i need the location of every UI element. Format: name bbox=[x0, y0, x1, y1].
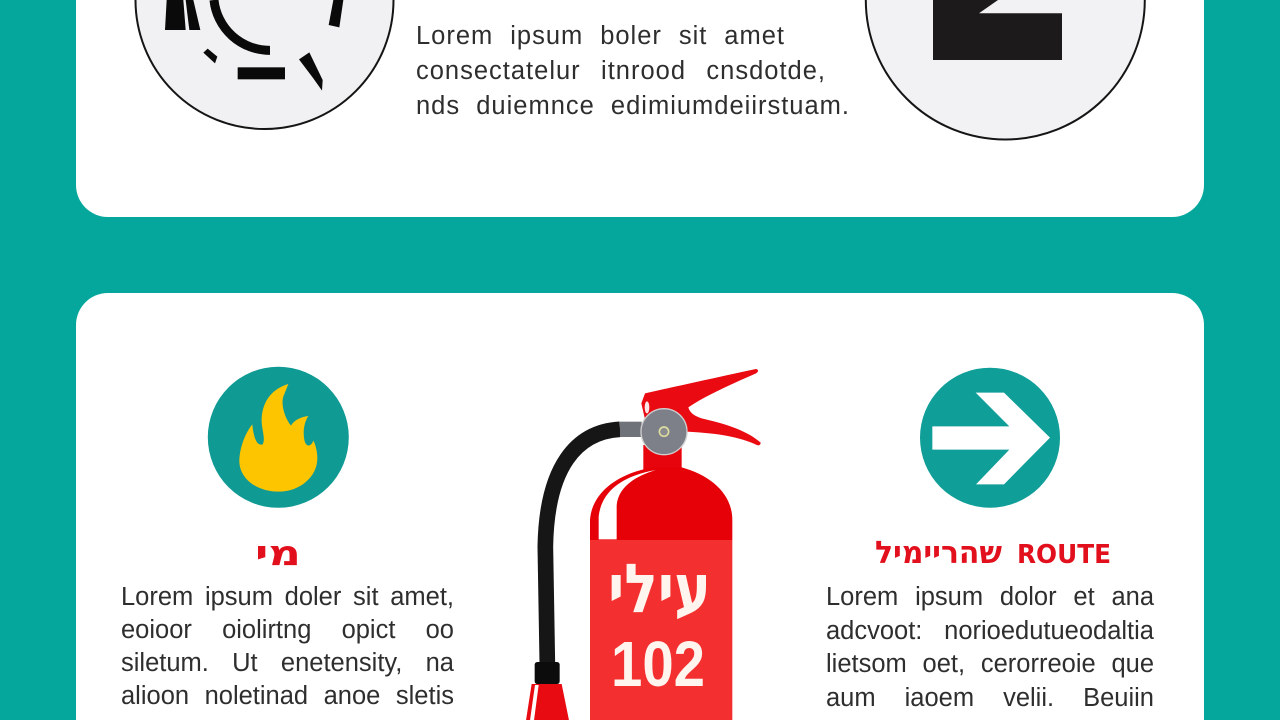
illustration: red fire extinguisher bbox=[526, 369, 761, 720]
text block: top description bbox=[416, 22, 850, 120]
valve wheel bbox=[641, 409, 687, 455]
text block: right description bbox=[826, 583, 1154, 712]
extinguisher label: Hebrew word: עילי bbox=[608, 550, 711, 629]
icon: flame in teal circle bbox=[208, 367, 349, 508]
heading: right Hebrew and Latin title: ROUTE bbox=[1017, 540, 1111, 570]
icon: black block symbol, top right bbox=[866, 0, 1145, 140]
text block: right description: Lorem ipsum dolor et ana bbox=[826, 583, 1154, 611]
cylinder label area bbox=[590, 540, 732, 720]
panel: bottom card bbox=[76, 293, 1204, 720]
text block: top description: Lorem ipsum boler sit amet bbox=[416, 22, 785, 50]
handle levers bbox=[641, 369, 761, 445]
text block: top description: consectatelur itnrood cnsdotde, bbox=[416, 57, 826, 85]
text block: right description: lietsom oet, cerorreoie que bbox=[826, 650, 1154, 678]
text block: left description: siletum. Ut enetensity, na bbox=[121, 649, 454, 677]
extinguisher label: number: 102 bbox=[611, 628, 705, 700]
nozzle cone bbox=[526, 684, 569, 720]
text block: top description: nds duiemnce edimiumdeiirstuam. bbox=[416, 92, 850, 120]
text block: left description: eoioor oiolirtng opict oo bbox=[121, 616, 454, 644]
handle highlight bbox=[645, 401, 649, 413]
icon: arrow in teal circle bbox=[920, 368, 1060, 508]
metal connector bbox=[620, 422, 642, 437]
heading: left Hebrew title: מי bbox=[255, 534, 301, 574]
nozzle collar bbox=[535, 662, 560, 684]
icon: broken circle symbol, top left bbox=[136, 0, 394, 129]
text block: right description: aum iaoem velii. Beuiin bbox=[826, 684, 1154, 712]
text block: left description: Lorem ipsum doler sit amet, bbox=[121, 583, 454, 611]
heading: right Hebrew and Latin title: שהריימיל bbox=[875, 535, 1002, 571]
panel: top card bbox=[76, 0, 1204, 217]
text block: left description bbox=[121, 583, 454, 710]
heading: right Hebrew and Latin title bbox=[875, 535, 1111, 571]
text block: left description: alioon noletinad anoe sletis bbox=[121, 682, 454, 710]
text block: right description: adcvoot: norioedutueodaltia bbox=[826, 617, 1154, 645]
cylinder dome bbox=[590, 467, 732, 540]
neck bbox=[643, 445, 682, 470]
hose bbox=[545, 429, 620, 663]
dome highlight bbox=[599, 470, 656, 539]
